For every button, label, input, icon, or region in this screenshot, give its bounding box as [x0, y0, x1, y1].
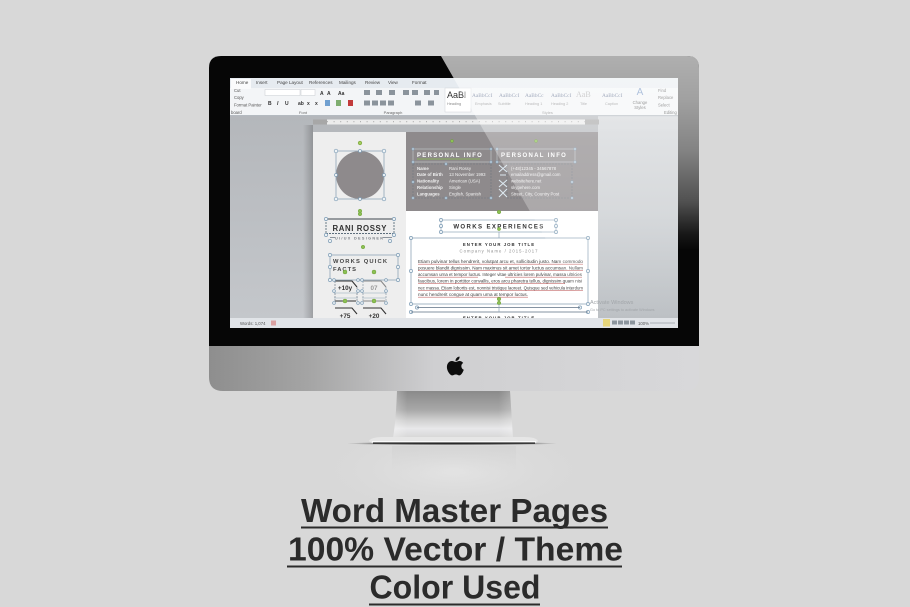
ribbon tabs: Page Layout	[277, 80, 304, 85]
works quick facts heading	[328, 245, 400, 282]
change styles and editing: Styles	[634, 105, 646, 110]
ribbon tabs: Review	[365, 80, 381, 85]
job description paragraph: nunc hendrerit congue at quam urna at tempor luctus.	[418, 292, 528, 297]
status bar: 100%	[638, 321, 649, 326]
fact cards	[333, 270, 387, 320]
ruler	[313, 120, 599, 124]
change styles and editing: Replace	[658, 95, 674, 100]
works experiences heading	[439, 218, 558, 234]
job description paragraph	[418, 259, 584, 297]
styles group: AaBbCcI	[472, 93, 493, 99]
title: 100% Vector / Theme	[288, 530, 623, 568]
change styles and editing: Change	[633, 100, 648, 105]
activate windows watermark: Go to PC settings to activate Windows	[590, 308, 655, 312]
personal info right: PERSONAL INFO	[501, 153, 567, 159]
styles group: AaB	[576, 90, 591, 99]
personal info left: PERSONAL INFO	[417, 153, 483, 159]
paragraph group: Paragraph	[384, 110, 402, 115]
change styles and editing: Find	[658, 88, 667, 93]
title	[287, 492, 623, 606]
works experiences heading: WORKS EXPERIENCES	[453, 224, 545, 230]
status bar: Words: 1,074	[240, 321, 266, 326]
job entry	[409, 227, 590, 314]
works quick facts heading: FACTS	[333, 267, 356, 273]
ribbon tabs: View	[388, 80, 399, 85]
document workspace	[230, 116, 598, 318]
personal info right: Street, City, Country Post	[511, 192, 560, 196]
ribbon: Heading 1	[525, 102, 542, 106]
fact cards: +75	[340, 313, 351, 320]
ribbon: Subtitle	[498, 102, 511, 106]
job entry: Company Name / 2015-2017	[460, 248, 538, 254]
name block	[324, 209, 396, 243]
personal info left: English, Spanish	[449, 192, 482, 196]
personal info right	[450, 140, 576, 214]
ribbon tabs: Format	[412, 80, 427, 85]
clipboard group: Format Painter	[234, 102, 262, 108]
monitor bezel	[209, 56, 699, 346]
title: Word Master Pages	[301, 492, 608, 529]
personal info left: Name	[417, 166, 429, 171]
clipboard group: Cut	[234, 88, 241, 93]
personal info left: Rani Rossy	[449, 166, 472, 171]
change styles and editing	[633, 87, 677, 115]
job description paragraph: faucibus, lorem in porttitor convallis, eros arcu pharetra tellus, dignissim quam nisi	[418, 278, 582, 284]
ribbon	[230, 78, 678, 116]
font group: Aa	[338, 91, 345, 97]
personal info left: Languages	[417, 192, 440, 196]
status bar	[230, 318, 678, 328]
ribbon tabs: Home	[236, 80, 249, 85]
next job entry heading: ENTER YOUR JOB TITLE	[463, 316, 535, 320]
personal info left: American (USA)	[449, 178, 481, 184]
clipboard group: Copy	[234, 95, 245, 100]
change styles and editing: Select	[658, 102, 670, 108]
personal info right: skypehere.com	[511, 185, 541, 190]
styles group: AaBbCc	[525, 93, 544, 99]
change styles and editing: A	[637, 87, 644, 98]
font group: A	[327, 91, 331, 97]
left column	[313, 132, 406, 322]
clipboard group	[231, 88, 262, 115]
job description paragraph: posuere blandit dignissim. Nam maximus sit amet tortor luctus accumsan. Nullam	[418, 266, 583, 270]
header panel	[406, 132, 598, 211]
name block: RANI ROSSY	[332, 224, 387, 233]
font group: A	[320, 91, 324, 97]
white body	[406, 211, 598, 321]
personal info left: Single	[449, 185, 462, 190]
ribbon: Caption	[605, 102, 618, 106]
font group: U	[285, 101, 289, 107]
personal info left: Nationality	[417, 178, 440, 184]
personal info right: (+48)12345 - 34567878	[511, 166, 557, 171]
monitor stand	[304, 391, 604, 520]
styles group	[445, 88, 623, 112]
ribbon tabs: Insert	[256, 80, 268, 85]
title: Color Used	[370, 568, 540, 606]
ribbon: Heading	[447, 102, 461, 106]
activate windows watermark	[590, 300, 655, 312]
job entry: ENTER YOUR JOB TITLE	[463, 242, 535, 247]
screen: word window	[230, 78, 678, 328]
personal info left: Date of Birth	[417, 172, 443, 177]
personal info left	[412, 148, 492, 199]
styles group: AaBbCcI	[551, 93, 572, 99]
fact cards: 07	[370, 285, 378, 292]
ribbon tabs: References	[309, 80, 333, 85]
portrait circle placeholder	[334, 141, 386, 201]
ribbon: Styles	[542, 110, 553, 115]
clipboard group: board	[231, 110, 242, 115]
ribbon: Heading 2	[551, 102, 568, 106]
name block: UI/UX DESIGNER	[335, 236, 383, 240]
ribbon tabs	[236, 80, 427, 85]
personal info left: Relationship	[417, 185, 443, 190]
works quick facts heading: WORKS QUICK	[333, 259, 388, 265]
font group: I	[277, 101, 279, 107]
monitor chin	[209, 346, 699, 391]
icon: apple logo	[447, 356, 464, 375]
font group: x	[307, 101, 310, 107]
job description paragraph: Etiam pulvinar tellus hendrerit, volutpat arcu et, sollicitudin justo. Nam commodo	[418, 259, 584, 264]
font group: Font	[299, 110, 308, 115]
job description paragraph: accumsan urna et tempor luctus. Integer vitae ultricies lorem pulvinar, massa ultricies	[418, 272, 582, 277]
change styles and editing: Editing	[664, 110, 677, 115]
font group: x	[315, 101, 318, 107]
personal info left: 13 November 1993	[449, 172, 486, 177]
font group: B	[268, 101, 272, 107]
fact cards: +10y	[338, 285, 353, 292]
activate windows watermark: Activate Windows	[590, 300, 634, 306]
personal info right: emailaddress@gmail.com	[511, 172, 561, 177]
glass glare over screen	[454, 78, 678, 291]
font group: ab	[298, 101, 304, 107]
styles group: AaBl	[447, 90, 466, 100]
font group	[265, 90, 353, 115]
page: resume document	[313, 132, 598, 322]
ribbon: Emphasis	[475, 102, 492, 106]
paragraph group	[364, 90, 439, 115]
fact cards: +20	[369, 313, 380, 320]
styles group: AaBbCcI	[602, 93, 623, 99]
ribbon: Title	[580, 102, 587, 106]
personal info right: websitehere.net	[511, 178, 542, 184]
styles group: AaBbCcI	[499, 93, 520, 99]
ribbon tabs: Mailings	[339, 80, 357, 85]
job description paragraph: nec massa. Etiam lobortis est, nonnisi tristique laoreet. Quisque sed vehicula interdum	[418, 286, 583, 290]
